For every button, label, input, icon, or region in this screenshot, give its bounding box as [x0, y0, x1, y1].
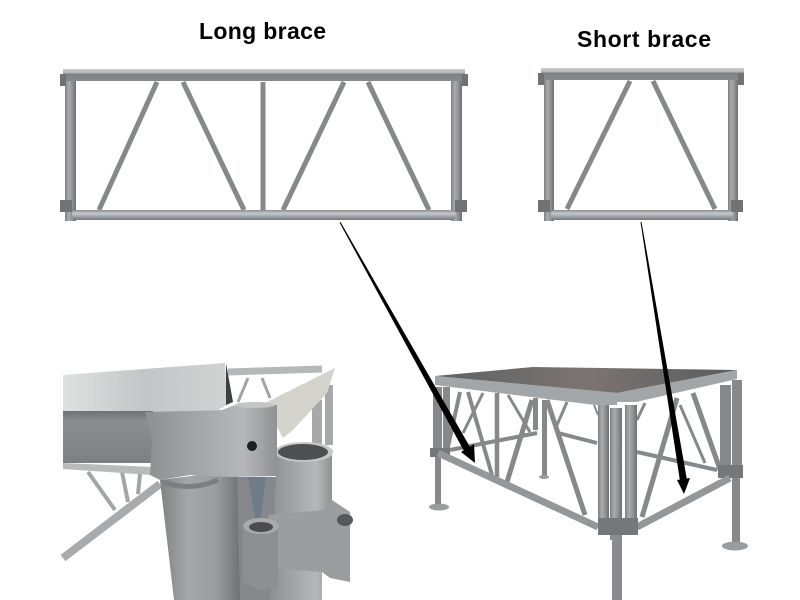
top bar	[63, 69, 465, 81]
stage photo	[429, 367, 748, 600]
deck top	[435, 367, 737, 393]
gap behind pin	[236, 477, 276, 600]
foot plates	[429, 475, 748, 550]
clamps	[538, 73, 744, 212]
threaded pin	[248, 477, 266, 522]
long brace frame	[60, 69, 468, 221]
screw hole	[247, 441, 257, 451]
top plate	[63, 363, 227, 412]
weld seam	[163, 480, 218, 487]
deck edge right	[617, 370, 737, 402]
far posts	[312, 385, 333, 446]
deck edge left	[435, 376, 617, 405]
back tube and open end	[270, 450, 332, 600]
arrow: short brace to stage	[640, 222, 690, 494]
lower hinge barrel	[243, 522, 278, 590]
rear legs and frame	[438, 380, 737, 542]
diagonal and vertical struts	[99, 82, 429, 210]
left post	[544, 80, 554, 221]
aluminium beam	[63, 411, 153, 463]
lug hole	[337, 514, 353, 526]
lower flange	[63, 463, 152, 475]
far side plate	[267, 368, 335, 438]
corner sleeve	[145, 405, 277, 480]
dark gap at plate corner	[226, 363, 233, 405]
bottom tube	[551, 210, 733, 220]
main pole	[160, 470, 240, 600]
right post	[451, 80, 462, 221]
hinge opening	[243, 518, 279, 534]
front corner columns	[598, 405, 609, 523]
right post	[728, 80, 738, 221]
bottom tube	[72, 210, 456, 220]
title: Short brace: Short brace	[577, 26, 711, 52]
rear rail and struts	[63, 369, 322, 558]
front braces	[438, 453, 730, 527]
clamps	[430, 448, 743, 478]
sleeve opening	[235, 402, 275, 408]
tube opening	[275, 442, 333, 462]
front leg	[612, 535, 622, 600]
diagonal struts	[567, 81, 715, 209]
title: Long brace: Long brace	[199, 18, 326, 44]
short brace frame	[538, 68, 744, 221]
top bar	[541, 68, 744, 80]
lug on tube	[268, 500, 350, 582]
clamps	[60, 74, 468, 212]
close-up photo of corner joint	[63, 363, 353, 600]
arrow: long brace to stage	[340, 222, 475, 463]
left post	[65, 80, 76, 221]
